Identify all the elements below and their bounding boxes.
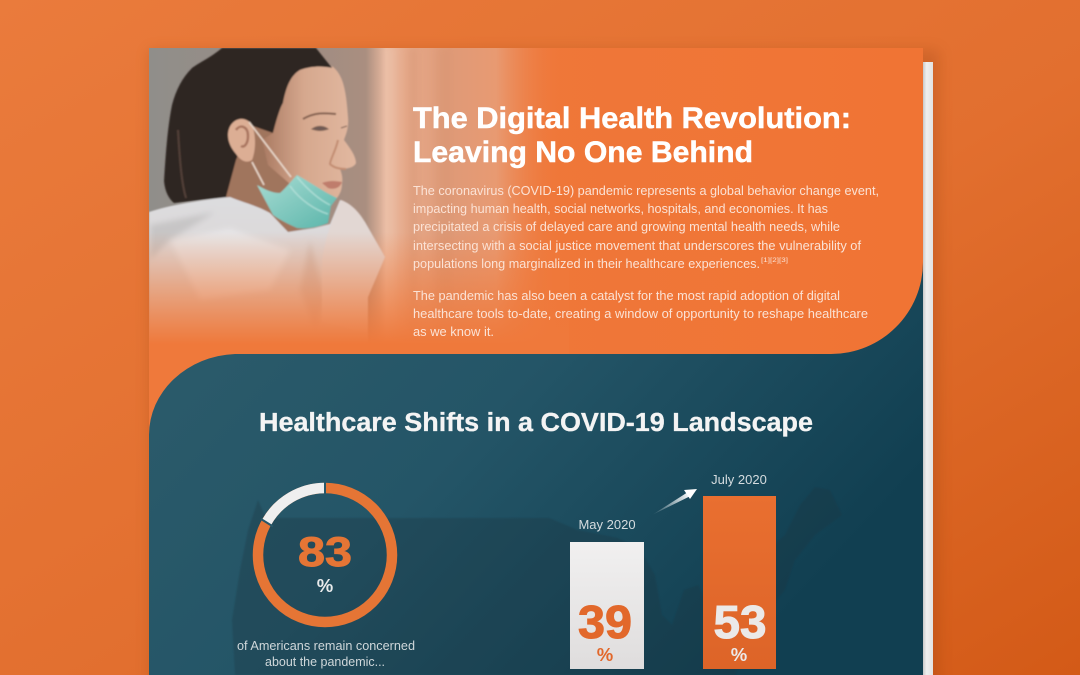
inner ear bbox=[236, 127, 248, 147]
bar: May 2020 bbox=[570, 517, 644, 669]
back page edge bbox=[923, 62, 933, 675]
mask folds bbox=[290, 177, 330, 214]
document shadow bbox=[149, 50, 939, 675]
panel: orange header bbox=[149, 48, 923, 354]
donut chart: 83 percent: 83 bbox=[298, 528, 352, 575]
donut caption bbox=[237, 638, 415, 669]
text block: catalyst paragraph: healthcare tools to-date, creating a window of opportunity to reshape healthcare bbox=[413, 306, 868, 321]
text block: introduction: populations long marginalized in their healthcare experiences. bbox=[413, 256, 760, 271]
wall backdrop bbox=[149, 48, 384, 328]
mask strap bbox=[249, 122, 291, 185]
text block: catalyst paragraph bbox=[413, 288, 868, 339]
text block: introduction: intersecting with a social justice movement that underscores the vulnerability of bbox=[413, 238, 861, 253]
title: The Digital Health Revolution: bbox=[413, 102, 851, 135]
text block: introduction: [1][2][3] bbox=[761, 257, 788, 264]
text block: introduction bbox=[413, 183, 879, 271]
bar: May 2020: 39 bbox=[578, 596, 632, 648]
suit folds bbox=[150, 214, 320, 301]
gloved hand bbox=[333, 200, 366, 228]
donut chart: 83 percent bbox=[258, 481, 392, 622]
map silhouette of the United States bbox=[232, 502, 622, 674]
bar: July 2020 bbox=[703, 472, 776, 669]
window curtain bbox=[369, 48, 538, 334]
text block: introduction: The coronavirus (COVID-19) pandemic represents a global behavior change event, bbox=[413, 183, 879, 198]
surgical mask bbox=[257, 175, 337, 228]
face bbox=[262, 66, 356, 201]
hair highlight bbox=[178, 130, 186, 198]
text block: introduction: impacting human health, social networks, hospitals, and economies. It has bbox=[413, 201, 828, 216]
text block: catalyst paragraph: The pandemic has also been a catalyst for the most rapid adoption of digital bbox=[413, 288, 840, 303]
bar: July 2020: 53 bbox=[714, 596, 766, 648]
page base bbox=[149, 48, 923, 675]
bar: May 2020: May 2020 bbox=[578, 517, 636, 532]
brow bbox=[303, 113, 336, 119]
curtain streaks bbox=[384, 48, 450, 338]
bar: July 2020: % bbox=[731, 644, 747, 665]
remaining share arc bbox=[266, 488, 325, 522]
arrow: upward trend bbox=[652, 489, 697, 515]
lips bbox=[322, 181, 342, 189]
nose shade bbox=[330, 140, 346, 169]
bar: May 2020: % bbox=[597, 644, 613, 665]
text block: introduction: precipitated a crisis of delayed care and growing mental health needs, while bbox=[413, 219, 840, 234]
bottom fade into orange bbox=[149, 237, 536, 354]
title bbox=[413, 102, 851, 169]
bar chart: May vs July 2020 bbox=[570, 472, 776, 669]
eye bbox=[312, 126, 347, 130]
photo: healthcare worker with lowered mask bbox=[149, 48, 538, 338]
section heading: Healthcare Shifts in a COVID-19 Landscape bbox=[259, 409, 813, 437]
ear bbox=[228, 119, 255, 162]
donut caption: about the pandemic... bbox=[265, 654, 385, 669]
panel: teal section bbox=[149, 260, 923, 675]
bar: July 2020: July 2020 bbox=[711, 472, 767, 487]
protective suit bbox=[149, 196, 366, 332]
arc gaps bbox=[261, 481, 325, 526]
donut caption: of Americans remain concerned bbox=[237, 638, 415, 653]
donut chart: 83 percent: % bbox=[317, 575, 333, 596]
title: Leaving No One Behind bbox=[413, 136, 753, 169]
figure bbox=[149, 48, 385, 345]
neck and jaw bbox=[226, 126, 304, 232]
text block: catalyst paragraph: as we know it. bbox=[413, 324, 494, 339]
ponytail and hair bbox=[164, 48, 332, 203]
